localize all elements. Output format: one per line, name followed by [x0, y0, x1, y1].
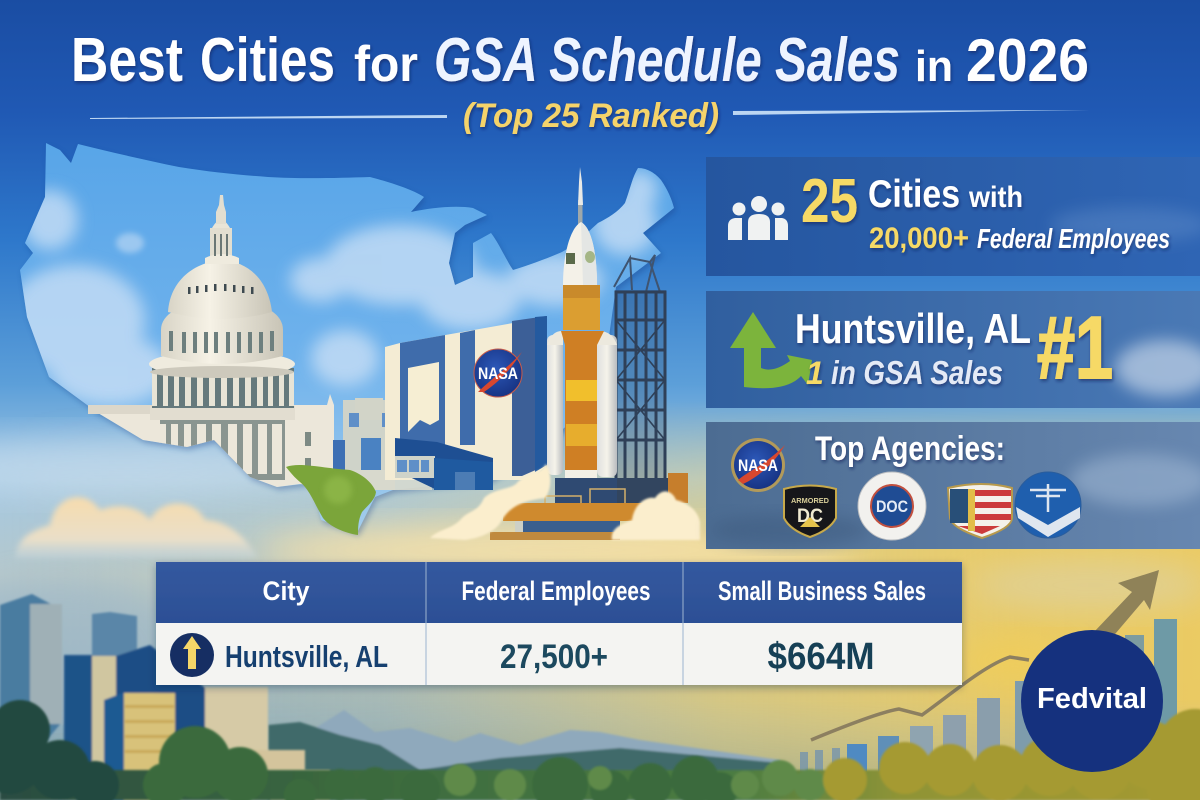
panel: Huntsville number one: in GSA Sales: [831, 354, 1003, 391]
table header row: City: [262, 576, 310, 606]
table header row: [156, 562, 962, 623]
title: Cities: [200, 26, 335, 95]
icon: DC shield badge: [784, 486, 836, 537]
title: in: [915, 42, 953, 91]
rocket: [547, 167, 617, 478]
foreground tree line: [0, 700, 1200, 800]
growth bars and trend arrow: [800, 570, 1177, 780]
panel: 25 cities stat: Cities: [868, 173, 960, 216]
launch tower: [614, 255, 688, 504]
launch platform: [490, 478, 643, 540]
NASA logo on building: [474, 349, 522, 397]
title: for: [354, 36, 418, 92]
data table: $664M: [768, 636, 874, 678]
icon: DC shield badge: DC: [797, 506, 823, 527]
data table: [156, 562, 962, 685]
subtitle with rules: (Top 25 Ranked): [463, 97, 719, 135]
icon: NASA badge: [731, 438, 785, 492]
panel: Huntsville number one: 1: [806, 355, 824, 391]
NASA logo on building: NASA: [478, 364, 518, 383]
panel: Huntsville number one: Huntsville, AL: [795, 305, 1031, 352]
icon: DOC round badge: DOC: [876, 497, 908, 516]
NASA vehicle assembly building: [385, 316, 547, 490]
icon: DC shield badge: ARMORED: [791, 498, 829, 505]
icon: NASA badge: NASA: [738, 456, 778, 475]
table header row: Federal Employees: [462, 576, 650, 606]
panel: 25 cities stat: with: [968, 181, 1023, 214]
table header row: Small Business Sales: [718, 576, 926, 606]
icon: blue aviation badge: [1015, 472, 1081, 538]
title: [71, 26, 1089, 95]
panel: 25 cities stat: [706, 157, 1200, 276]
title: 2026: [966, 27, 1089, 94]
panel: 25 cities stat: 20,000+: [869, 222, 969, 255]
green tree patch at Florida tip of the map: [286, 465, 376, 535]
panel: top agencies: [706, 422, 1200, 549]
icon: people group: [728, 196, 788, 240]
subtitle with rules: [90, 97, 1090, 135]
panel: top agencies: Top Agencies:: [815, 430, 1005, 468]
panel: 25 cities stat: 25: [801, 167, 858, 236]
data table: Huntsville, AL: [225, 639, 388, 674]
title: GSA Schedule Sales: [434, 26, 900, 95]
city skyline: [0, 594, 330, 800]
data table: 27,500+: [500, 638, 608, 676]
panel: Huntsville number one: [706, 291, 1200, 408]
map of the United States: [5, 143, 676, 536]
icon: green up arrow: [730, 312, 812, 388]
launch smoke clouds: [430, 464, 700, 540]
logo: Fedvital badge: Fedvital: [1037, 683, 1147, 715]
icon: DOC round badge: [858, 472, 926, 540]
title: Best: [71, 26, 183, 95]
warm clouds lower left: [15, 497, 258, 558]
panel: Huntsville number one: #1: [1037, 298, 1113, 397]
icon: flag shield badge: [948, 484, 1012, 538]
capitol building: [88, 195, 334, 488]
small annex building: [333, 398, 432, 490]
logo: Fedvital badge: [1021, 630, 1163, 772]
distant mountains: [268, 710, 800, 800]
icon: up arrow medallion: [170, 633, 214, 677]
